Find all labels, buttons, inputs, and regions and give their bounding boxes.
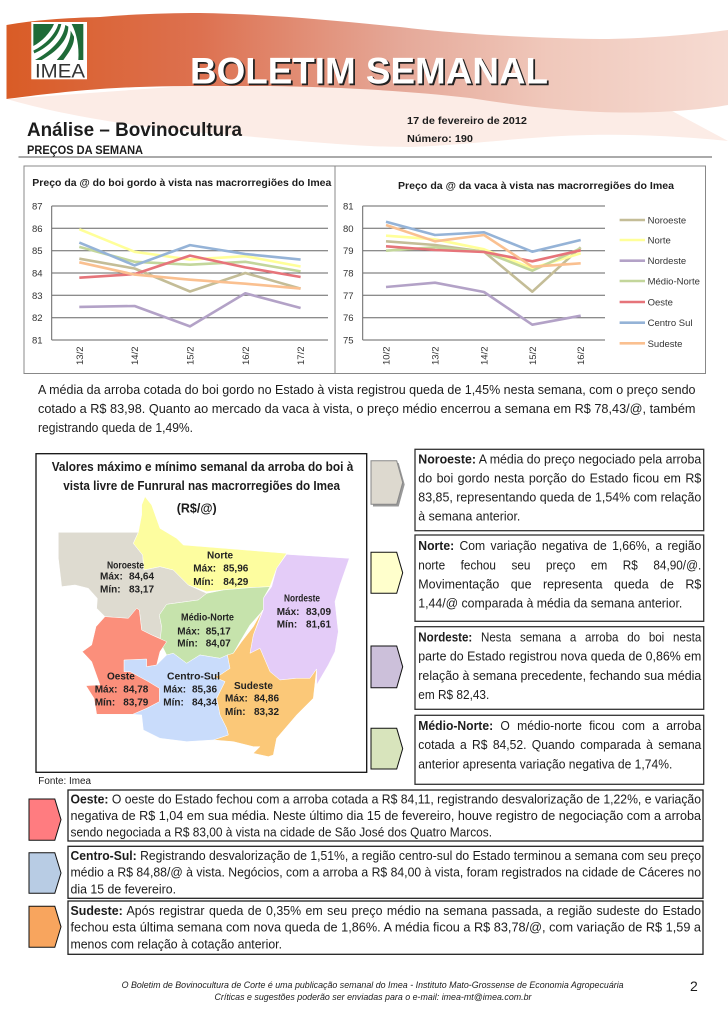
chart legend: Norte: [648, 236, 671, 246]
line chart: boi gordo: 82: [32, 313, 43, 324]
line chart: vaca: 76: [343, 313, 354, 324]
map label: Centro-Sul: Mín:: [163, 698, 184, 709]
panel: Norte: [415, 535, 704, 621]
line chart: boi gordo: 15/2: [186, 346, 196, 365]
line chart: vaca: Preço da @ da vaca à vista nas macrorregiões do Imea: [398, 180, 674, 192]
line chart: vaca: 15/2: [528, 346, 539, 365]
map label: Nordeste: 81,61: [306, 620, 331, 631]
line chart: boi gordo: 83: [32, 291, 43, 302]
map heading: Valores máximo e mínimo semanal da arroba do boi à: [52, 460, 353, 474]
line chart: boi gordo: 84: [32, 268, 43, 280]
line chart: vaca: 75: [343, 336, 354, 346]
section heading: PREÇOS DA SEMANA: [27, 143, 143, 157]
map label: Norte: Mín:: [193, 577, 214, 588]
icon: Norte arrow: [371, 552, 403, 593]
panel: Sudeste: menos com relação à cotação anterior.: [70, 937, 282, 951]
panel: Oeste: negativa de R$ 1,04 em sua média. Neste último dia 15 de fevereiro, houve registro de negociação com a arroba: [70, 809, 701, 823]
line chart: vaca: [343, 180, 674, 365]
map label: Médio-Norte: 85,17: [206, 626, 231, 637]
intro text: [38, 383, 696, 435]
icon: Nordeste arrow: [371, 646, 403, 688]
intro text: A média da arroba cotada do boi gordo no Estado à vista registrou queda de 1,45% nesta semana, com o preço sendo: [38, 383, 696, 397]
map label: Norte: Norte: [207, 551, 234, 562]
icon: Noroeste arrow: [371, 461, 405, 506]
map label: Noroeste: Mín:: [100, 585, 121, 596]
panel: Nordeste: relação à semana precedente, fechando sua média: [418, 669, 701, 683]
line chart: vaca: 81: [343, 202, 354, 212]
map label: Oeste: Mín:: [95, 698, 115, 709]
line chart: boi gordo: 86: [32, 224, 43, 235]
panel: Centro-Sul: Centro-Sul: Registrando desvalorização de 1,51%, a região centro-sul do Estado terminou a semana com seu preço: [70, 849, 701, 863]
map label: Médio-Norte: Médio-Norte: [181, 613, 234, 624]
map label: Nordeste: 83,09: [306, 607, 331, 618]
panel: Noroeste: do boi gordo nesta porção do Estado ficou em R$: [418, 471, 701, 485]
panel: Noroeste: Noroeste: A média do preço negociado pela arroba: [418, 452, 701, 466]
line chart: vaca: 79: [343, 246, 354, 257]
chart legend: Médio-Norte: [648, 276, 700, 288]
map label: Sudeste: 83,32: [254, 707, 279, 718]
map label: Oeste: 83,79: [123, 698, 149, 709]
map label: Norte: 85,96: [223, 564, 249, 575]
panel: Médio-Norte: Médio-Norte: O médio-norte ficou com a arroba: [418, 719, 701, 733]
map label: Oeste: 84,78: [123, 684, 149, 695]
chart legend: Centro Sul: [648, 318, 692, 329]
chart legend: Oeste: [648, 298, 673, 308]
panel: Norte: Norte: Com variação negativa de 1,66%, a região: [418, 539, 701, 553]
date: 17 de fevereiro de 2012: [407, 115, 527, 127]
panel: Centro-Sul: médio a R$ 84,88/@ à vista. Negócios, com a arroba a R$ 84,00 à vista, foram registrados na cidade de Cáceres no: [70, 866, 701, 880]
map label: Nordeste: Máx:: [277, 607, 299, 618]
map label: Médio-Norte: Máx:: [177, 626, 200, 637]
map label: Sudeste: Mín:: [225, 707, 246, 718]
panel: Oeste: Oeste: O oeste do Estado fechou com a arroba cotada a R$ 84,11, registrando desvalorização de 1,22%, e variação: [70, 792, 701, 806]
panel: Nordeste: Nordeste: Nesta semana a arroba do boi nesta: [418, 631, 701, 645]
map: Mato Grosso regions: [58, 497, 349, 757]
map label: Médio-Norte: Mín:: [177, 639, 198, 650]
line chart: boi gordo: 85: [32, 246, 43, 257]
panel: charts: [24, 166, 706, 374]
footer note: O Boletim de Bovinocultura de Corte é uma publicação semanal do Imea - Instituto Mato-Grossense de Economia Agropecuária: [122, 980, 624, 991]
map label: Norte: Máx:: [193, 564, 216, 575]
map label: Norte: [193, 551, 249, 588]
line chart: vaca: 78: [343, 268, 354, 280]
panel: Noroeste: [415, 449, 704, 531]
map label: Noroeste: 83,17: [129, 585, 154, 596]
chart legend: Sudeste: [648, 339, 682, 350]
panel: Noroeste: 83,85, representando queda de 1,54% com relação: [418, 490, 701, 504]
map label: Centro-Sul: 85,36: [192, 684, 217, 695]
map label: Noroeste: Máx:: [100, 571, 123, 582]
map label: Nordeste: [277, 594, 331, 631]
logo: IMEA: IMEA: [35, 62, 85, 83]
line chart: vaca: 10/2: [382, 346, 392, 365]
logo: IMEA: [31, 22, 87, 83]
map label: Nordeste: Nordeste: [284, 594, 320, 605]
panel: Norte: norte fechou seu preço em R$ 84,90/@.: [418, 558, 701, 572]
intro text: registrando queda de 1,49%.: [38, 421, 193, 435]
map label: Médio-Norte: [177, 613, 234, 650]
panel: map: [36, 454, 367, 772]
intro text: cotado a R$ 83,98. Quanto ao mercado da vaca à vista, o preço médio encerrou a semana em R$ 78,43/@, também: [38, 402, 696, 416]
panel: Oeste: sendo negociada a R$ 83,00 à vista na cidade de São José dos Quatro Marcos.: [70, 826, 492, 840]
panel: Sudeste: Sudeste: Após registrar queda de 0,35% em seu preço médio na semana passada, a região sudeste do Estado: [70, 904, 701, 918]
icon: Centro-Sul arrow: [29, 853, 61, 893]
panel: Sudeste: [68, 901, 703, 954]
map label: Norte: 84,29: [223, 577, 249, 588]
line chart: boi gordo: 17/2: [296, 346, 307, 365]
map label: Noroeste: Noroeste: [107, 560, 144, 572]
icon: Oeste arrow: [29, 799, 61, 840]
line chart: boi gordo: 16/2: [241, 346, 252, 365]
icon: Sudeste arrow: [29, 906, 61, 947]
panel: Nordeste: em R$ 82,43.: [418, 688, 489, 702]
line chart: vaca: 77: [343, 291, 354, 302]
map label: Centro-Sul: 84,34: [192, 698, 217, 709]
map label: Oeste: [95, 672, 149, 709]
title: BOLETIM SEMANAL: [190, 50, 548, 92]
panel: Médio-Norte: cotada a R$ 84,52. Quando comparada à semana: [418, 738, 701, 752]
map label: Oeste: Oeste: [107, 672, 135, 683]
map label: Centro-Sul: Máx:: [163, 684, 186, 695]
map label: Nordeste: Mín:: [277, 620, 297, 631]
chart legend: [620, 216, 700, 350]
panel: Médio-Norte: [415, 715, 704, 784]
panel: Sudeste: fechou esta última semana com nova queda de 1,86%. A média ficou a R$ 83,78/@, com variação de R$ 1,59 a: [70, 921, 701, 935]
map heading: vista livre de Funrural nas macrorregiões do Imea: [63, 479, 341, 493]
panel: Oeste: [68, 790, 703, 841]
header banner: [6, 13, 728, 147]
panel: Nordeste: parte do Estado registrou nova queda de 0,86% em: [418, 650, 701, 664]
map heading: (R$/@): [177, 502, 217, 516]
map label: Sudeste: Sudeste: [234, 681, 273, 692]
panel: Nordeste: [415, 627, 704, 709]
panel: Centro-Sul: [68, 846, 703, 898]
map label: Noroeste: [100, 560, 154, 596]
map label: Noroeste: 84,64: [129, 571, 154, 582]
line chart: vaca: 16/2: [576, 346, 587, 365]
title: BOLETIM SEMANAL: [192, 52, 550, 93]
line chart: boi gordo: 81: [32, 336, 43, 346]
icon: Médio-Norte arrow: [371, 728, 403, 769]
map label: Sudeste: 84,86: [254, 694, 279, 705]
page number: 2: [690, 978, 698, 994]
panel: Norte: 1,44/@ comparada à média da semana anterior.: [418, 596, 682, 610]
panel: Noroeste: à semana anterior.: [418, 509, 520, 523]
line chart: boi gordo: 13/2: [75, 346, 86, 365]
line chart: vaca: 14/2: [480, 346, 490, 365]
map label: Centro-Sul: Centro-Sul: [167, 672, 220, 683]
issue number: Número: 190: [407, 133, 473, 145]
line chart: boi gordo: [32, 177, 331, 365]
map label: Médio-Norte: 84,07: [206, 639, 231, 650]
footer note: Críticas e sugestões poderão ser enviadas para o e-mail: imea-mt@imea.com.br: [214, 992, 532, 1003]
line chart: vaca: 13/2: [430, 346, 442, 365]
line chart: boi gordo: Preço da @ do boi gordo à vista nas macrorregiões do Imea: [32, 177, 331, 189]
source note: Fonte: Imea: [38, 776, 91, 787]
panel: Médio-Norte: anterior apresenta variação negativa de 1,74%.: [418, 757, 672, 771]
line chart: vaca: 80: [343, 224, 354, 235]
map label: Oeste: Máx:: [95, 684, 117, 695]
panel: Centro-Sul: dia 15 de fevereiro.: [70, 883, 176, 897]
map label: Sudeste: Máx:: [225, 694, 248, 705]
chart legend: Noroeste: [648, 216, 686, 226]
line chart: boi gordo: 14/2: [130, 346, 141, 365]
line chart: boi gordo: 87: [32, 202, 43, 212]
subtitle: Análise – Bovinocultura: [27, 119, 242, 141]
footer note: [122, 980, 624, 1003]
map heading: [52, 460, 353, 516]
map label: Centro-Sul: [163, 672, 220, 709]
panel: Norte: Movimentação que representa queda de R$: [418, 577, 701, 591]
map label: Sudeste: [225, 681, 279, 718]
chart legend: Nordeste: [648, 256, 686, 267]
